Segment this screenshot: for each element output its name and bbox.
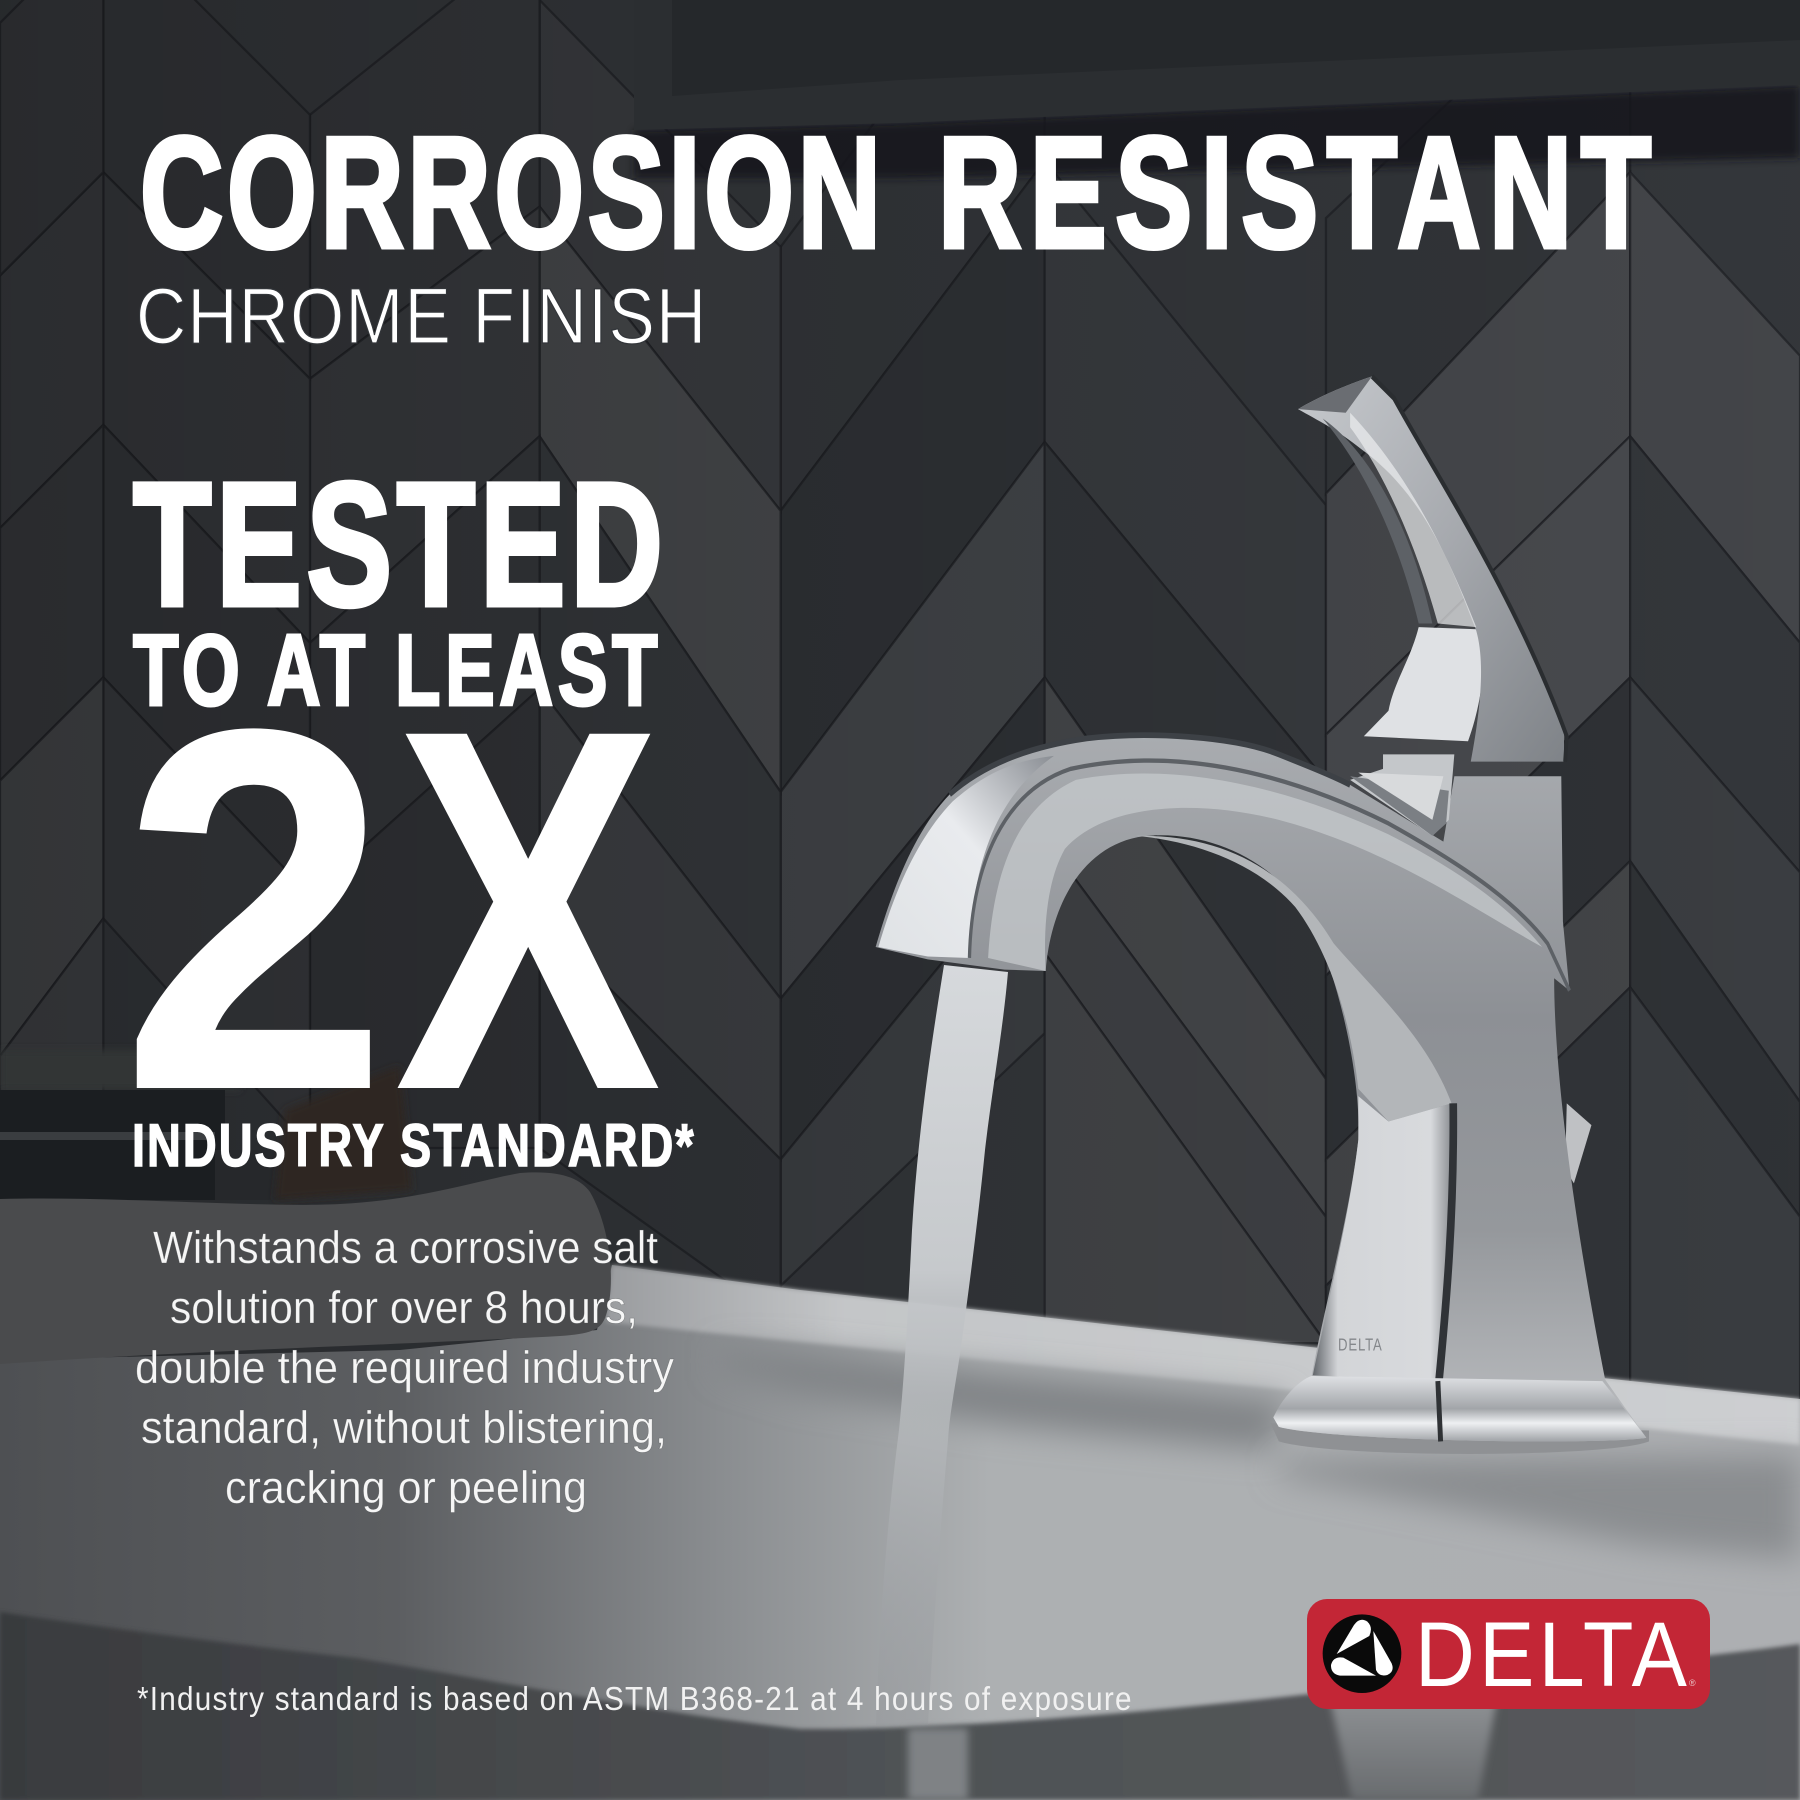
faucet stem bbox=[1313, 1096, 1452, 1381]
spout underside bbox=[1136, 836, 1452, 1122]
spout crease bbox=[969, 761, 1570, 991]
description paragraph: standard, without blistering, bbox=[141, 1402, 667, 1453]
brush and books behind towel bbox=[0, 1050, 412, 1200]
claim: to at least: TO AT LEAST bbox=[133, 614, 658, 727]
claim: 2X: 2 bbox=[120, 622, 389, 1197]
description paragraph: cracking or peeling bbox=[225, 1462, 587, 1513]
faucet and water reflections bbox=[908, 1700, 1497, 1800]
description paragraph: Withstands a corrosive salt bbox=[153, 1222, 658, 1273]
claim: tested: TESTED bbox=[133, 446, 663, 643]
description paragraph: solution for over 8 hours, bbox=[170, 1282, 638, 1333]
spout nozzle highlight bbox=[878, 756, 1054, 958]
chrome faucet bbox=[876, 376, 1649, 1454]
handle inner facet bbox=[1323, 419, 1432, 624]
claim: 2X bbox=[120, 622, 664, 1197]
subheading: chrome finish: CHROME FINISH bbox=[136, 272, 706, 360]
spout top dark edge bbox=[950, 735, 1350, 794]
registered mark: ® bbox=[1689, 1678, 1696, 1688]
handle knob bbox=[1364, 627, 1483, 741]
handle inner shine bbox=[1350, 413, 1476, 627]
Delta logo bbox=[1307, 1599, 1710, 1709]
description paragraph: double the required industry bbox=[135, 1342, 674, 1393]
faucet handle bbox=[1298, 376, 1564, 762]
claim: industry standard: INDUSTRY STANDARD* bbox=[132, 1112, 694, 1179]
tiled chevron wall bbox=[0, 0, 1800, 1424]
faucet deck reflection bbox=[1280, 1455, 1800, 1560]
faucet brand mark: DELTA bbox=[1338, 1336, 1383, 1355]
running water bbox=[876, 965, 1008, 1725]
white sink basin bbox=[0, 1265, 1800, 1800]
heading: corrosion resistant bbox=[140, 105, 1651, 281]
base gasket bbox=[1271, 1423, 1649, 1454]
rim reflection band bbox=[720, 1350, 1290, 1450]
heading: corrosion resistant: CORROSION bbox=[140, 105, 881, 281]
handle tip facet bbox=[1298, 376, 1372, 413]
footnote: *Industry standard is based on ASTM B368-21 at 4 hours of exposure bbox=[137, 1681, 1132, 1717]
faucet body bbox=[876, 735, 1646, 1441]
logo emblem bbox=[1323, 1614, 1401, 1693]
description paragraph bbox=[135, 1222, 674, 1513]
spout upper sheen bbox=[988, 774, 1542, 971]
claim: 2X: X bbox=[394, 622, 664, 1197]
logo wordmark: DELTA bbox=[1415, 1603, 1687, 1706]
base dark seam bbox=[1438, 1381, 1441, 1441]
heading: corrosion resistant: RESISTANT bbox=[938, 105, 1651, 281]
dark mirror frame bbox=[634, 0, 1800, 178]
pop-up lever bbox=[1565, 1103, 1591, 1183]
stem collar bbox=[1350, 754, 1454, 836]
towel bbox=[0, 1172, 611, 1364]
handle dark edge bbox=[1372, 376, 1567, 762]
front basin shadow bbox=[0, 1612, 1800, 1800]
faucet base bbox=[1273, 1376, 1646, 1441]
basin rim highlight bbox=[606, 1265, 1800, 1445]
stem shadow line bbox=[1439, 1103, 1453, 1381]
